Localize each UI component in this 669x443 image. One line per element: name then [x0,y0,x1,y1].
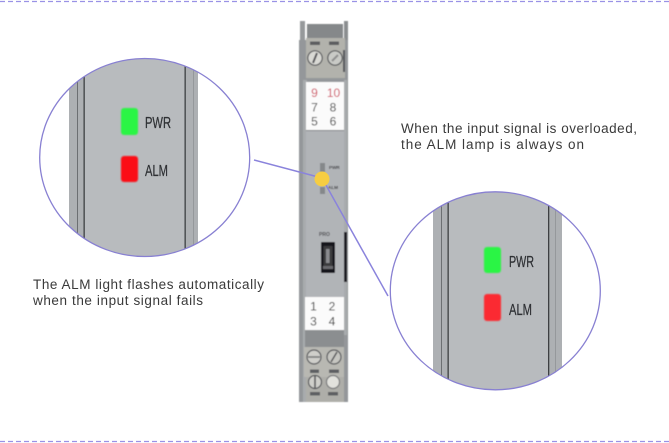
caption: ALM always on when overloaded [401,121,637,152]
lower terminal number label: 2 [329,300,336,314]
red ALM lamp [484,294,501,321]
right magnified circle: ALM always on [390,191,601,390]
PRO label and mini USB port [319,232,335,273]
callout line to left circle [254,160,322,178]
panel indicators: PWR and ALM [320,163,340,194]
upper terminal number label: 9 [311,86,318,100]
device side rails [299,21,348,402]
top terminal block [306,24,345,78]
device front panel [306,130,344,297]
red ALM lamp [121,156,138,182]
panel indicators: PWR and ALM: PWR [329,165,340,170]
lower terminal number label: 3 [310,314,317,328]
caption: ALM flashes on input failure: when the input signal fails [32,293,203,308]
caption: ALM always on when overloaded: When the input signal is overloaded, [401,121,637,136]
bottom terminal blocks [304,330,344,402]
lower terminal number label [305,297,344,330]
upper terminal number label: 10 [327,86,340,100]
green PWR lamp [121,108,138,135]
lower terminal number label: 4 [329,314,336,328]
caption: ALM flashes on input failure: The ALM light flashes automatically [33,277,264,292]
lower terminal number label: 1 [310,300,317,314]
callout line to right circle [322,178,388,296]
PWR lamp label: PWR [509,254,534,271]
caption: ALM flashes on input failure [32,277,264,308]
PWR lamp label: PWR [145,115,171,132]
upper terminal number label [306,82,344,130]
caption: ALM always on when overloaded: the ALM lamp is always on [401,137,584,152]
upper terminal number label: 7 [311,100,318,114]
ALM lamp label: ALM [509,302,532,319]
PRO label and mini USB port: PRO [319,232,330,238]
panel indicators: PWR and ALM: ALM [328,185,338,190]
yellow highlight dot on indicators [314,172,330,186]
green PWR lamp [484,247,501,273]
left magnified circle: ALM flashing [39,58,250,258]
upper terminal number label: 8 [330,100,337,114]
ALM lamp label: ALM [145,163,168,180]
upper terminal number label: 6 [330,114,337,128]
device: DIN rail signal isolator [299,21,348,402]
upper terminal number label: 5 [311,114,318,128]
black side slot [344,232,347,282]
